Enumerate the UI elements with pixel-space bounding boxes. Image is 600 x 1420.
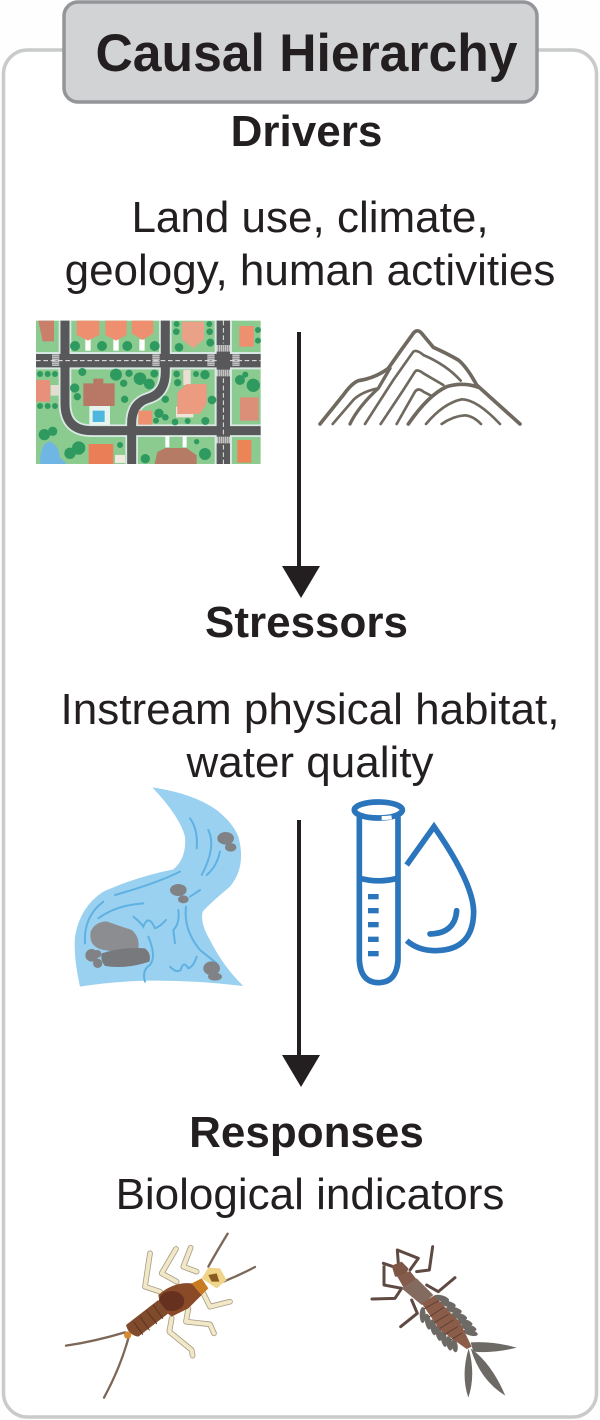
text block: stressors description: water quality xyxy=(185,738,434,787)
arrow: drivers to stressors xyxy=(282,332,320,598)
text block: drivers description xyxy=(65,193,555,295)
heading: Stressors: Stressors xyxy=(205,598,408,647)
icon: river xyxy=(75,787,243,987)
heading: Responses: Responses xyxy=(189,1108,424,1157)
text block: drivers description: geology, human activities xyxy=(65,246,555,295)
icon: test tube and water drop xyxy=(354,802,474,983)
text block: responses description: Biological indicators xyxy=(116,1170,504,1219)
heading: Drivers: Drivers xyxy=(231,107,382,156)
icon: neighbourhood map xyxy=(36,321,261,464)
text block: stressors description xyxy=(61,685,559,787)
icon: stonefly insect xyxy=(66,1234,255,1398)
title: Causal Hierarchy xyxy=(96,24,518,83)
text block: drivers description: Land use, climate, xyxy=(131,193,489,242)
text block: stressors description: Instream physical habitat, xyxy=(61,685,559,734)
icon: mayfly nymph xyxy=(372,1247,517,1398)
icon: mountain xyxy=(320,331,520,424)
title box xyxy=(64,2,537,102)
arrow: stressors to responses xyxy=(282,820,320,1087)
